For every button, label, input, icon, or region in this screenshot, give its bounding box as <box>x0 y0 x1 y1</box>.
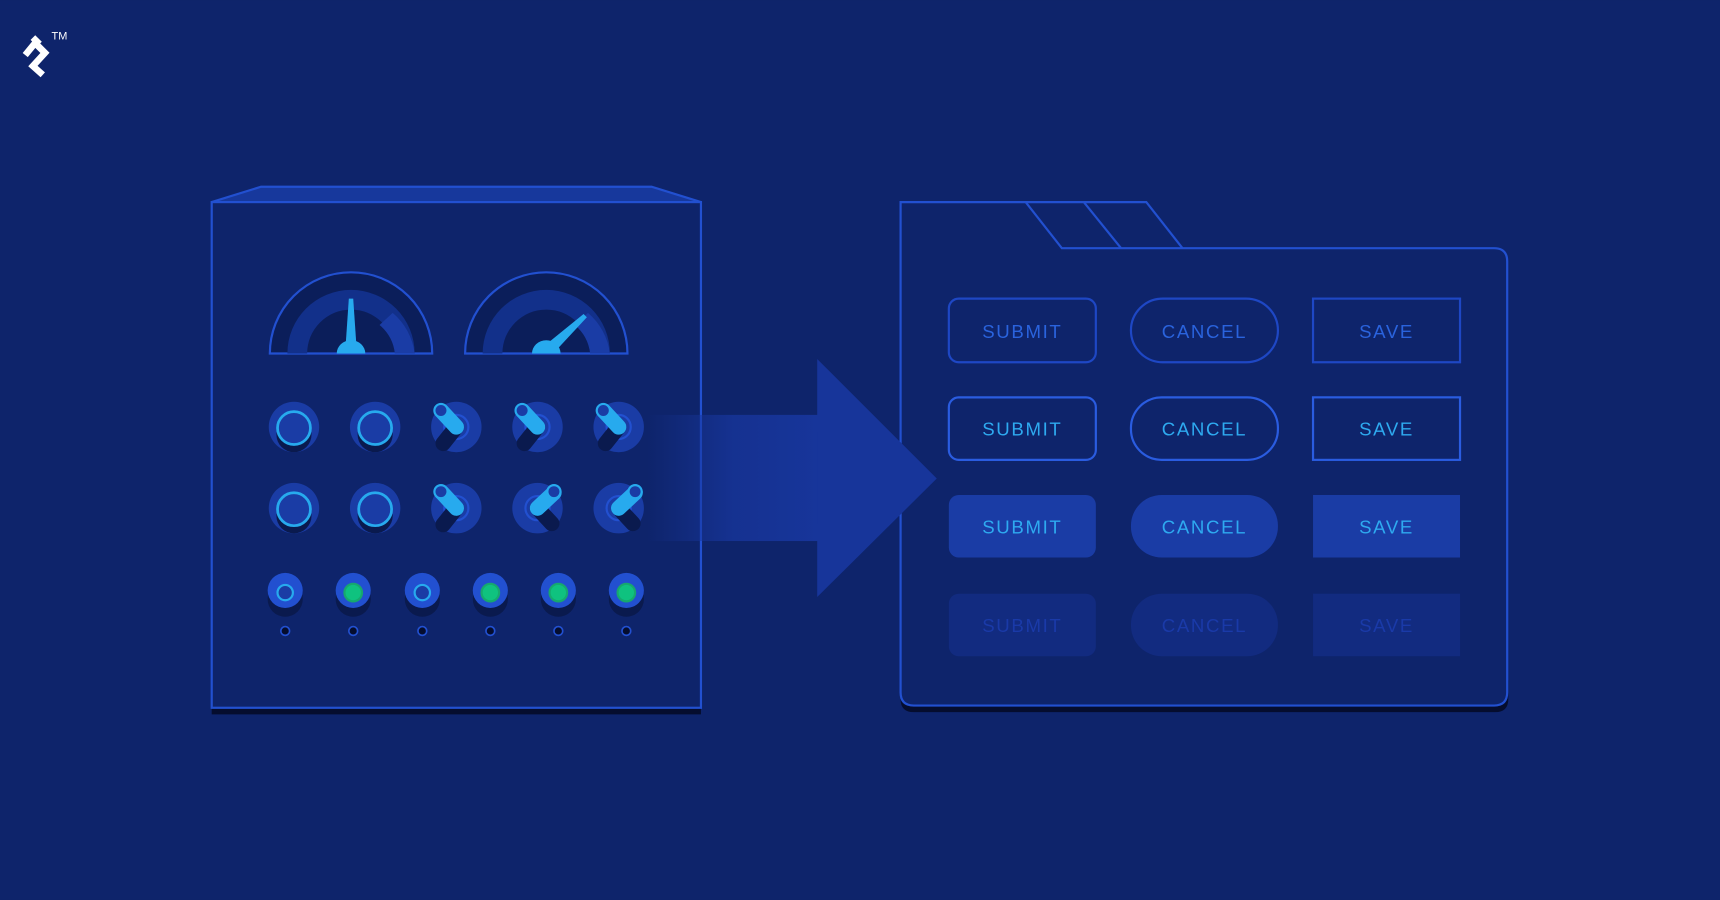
buttons row 4 disabled: SUBMIT <box>982 615 1062 636</box>
gauge 2 <box>465 272 627 353</box>
buttons row 2: SUBMIT <box>982 419 1062 440</box>
panel: button window <box>901 202 1508 712</box>
buttons row 3: CANCEL <box>1162 516 1247 537</box>
buttons row 1: SAVE <box>1359 321 1414 342</box>
buttons row 1 <box>949 299 1460 362</box>
gauge 1 <box>270 272 432 353</box>
buttons row 3: SAVE <box>1359 516 1414 537</box>
arrow <box>647 359 937 597</box>
logo <box>25 31 67 75</box>
buttons row 2 <box>949 397 1460 460</box>
buttons row 1: CANCEL <box>1162 321 1247 342</box>
knobs <box>269 402 644 533</box>
buttons row 3 <box>949 495 1460 558</box>
logo: TM <box>52 31 67 43</box>
buttons row 2: SAVE <box>1359 419 1414 440</box>
buttons row 4 disabled: CANCEL <box>1162 615 1247 636</box>
panel: control box <box>212 187 701 714</box>
LEDs <box>268 573 644 635</box>
buttons row 2: CANCEL <box>1162 419 1247 440</box>
buttons row 3: SUBMIT <box>982 516 1062 537</box>
buttons row 1: SUBMIT <box>982 321 1062 342</box>
buttons row 4 disabled: SAVE <box>1359 615 1414 636</box>
buttons row 4 disabled <box>949 594 1460 656</box>
